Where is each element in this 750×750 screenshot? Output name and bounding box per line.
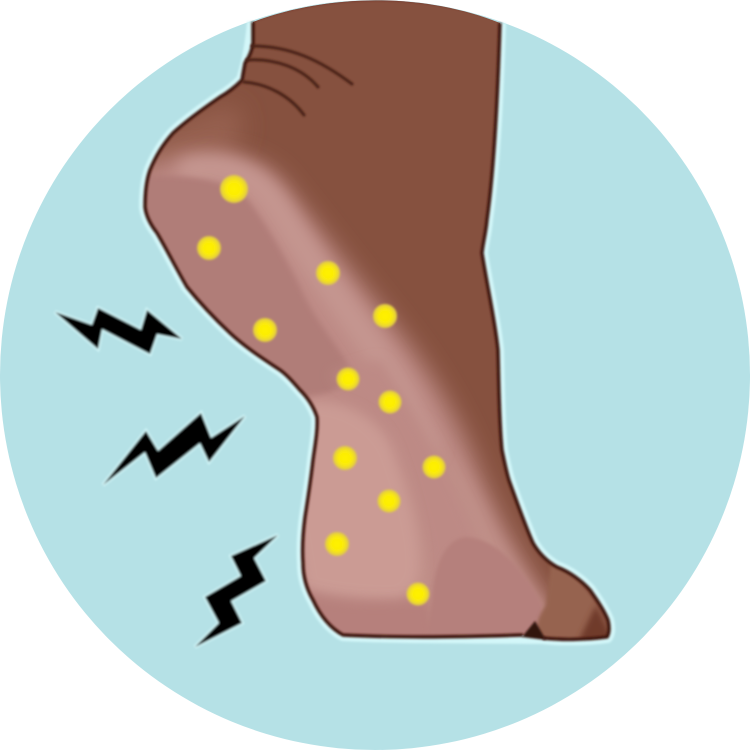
mid sole tone (378, 370, 430, 458)
pain points (197, 175, 446, 606)
ball pad (433, 538, 540, 634)
icon: lightning bolt bottom (195, 535, 278, 647)
ankle creases (244, 46, 352, 115)
toe crease (522, 621, 546, 640)
foot shading (130, 0, 620, 660)
toe shadow (578, 606, 608, 638)
heel rim warmth (157, 108, 241, 162)
inner sole tone (148, 176, 346, 396)
wide soft sole glow (150, 144, 548, 610)
toe (536, 566, 598, 638)
foot (130, 0, 620, 660)
foot halo (145, 22, 609, 639)
pad lower fade (340, 631, 525, 637)
lower sole tone (316, 597, 430, 634)
icon: lightning bolt middle (103, 413, 245, 485)
icon: lightning bolt top (55, 308, 182, 354)
upper edge fade (253, 0, 500, 20)
ridge highlight (190, 168, 425, 445)
foot outline (145, 22, 609, 639)
ball of foot pale area (304, 400, 418, 598)
soft lower right glow (496, 540, 508, 553)
